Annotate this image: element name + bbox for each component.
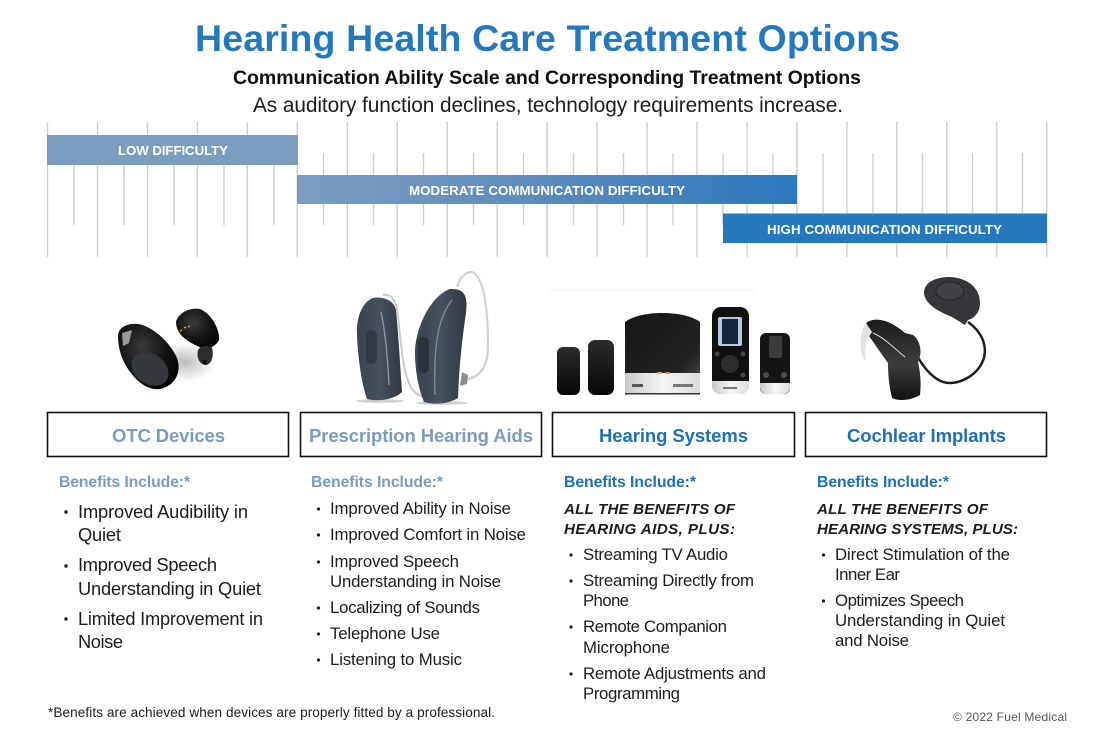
benefits heading: Benefits Include:* [59,474,191,491]
small remote [557,347,580,395]
communication ability scale [47,122,1047,257]
benefits list: Remote Adjustments and [583,664,766,683]
heading box [300,412,542,456]
benefits list [822,545,1010,650]
TV streamer [625,313,700,394]
bar: moderate communication difficulty: MODERATE COMMUNICATION DIFFICULTY [409,183,685,198]
benefits list: Streaming TV Audio [583,545,728,564]
heading box: Hearing Systems [599,425,748,446]
title: Hearing Health Care Treatment Options [195,17,900,59]
lead-in: HEARING SYSTEMS, PLUS: [817,521,1018,538]
heading box [48,412,288,456]
handset remote [712,307,749,394]
heading box: Cochlear Implants [847,425,1006,446]
benefits list: Optimizes Speech [835,591,964,610]
benefits list: Improved Ability in Noise [330,499,511,518]
benefits list: Listening to Music [330,650,462,669]
benefits list: Streaming Directly from [583,571,754,590]
benefits list: Improved Comfort in Noise [330,525,526,544]
tagline: As auditory function declines, technology requirements increase. [253,94,843,117]
image: cochlear implant [860,277,985,400]
bar: low difficulty: LOW DIFFICULTY [118,143,228,158]
benefits list: Inner Ear [835,565,900,584]
heading box: OTC Devices [112,425,225,446]
heading box: Prescription Hearing Aids [309,425,533,446]
benefits list: Direct Stimulation of the [835,545,1010,564]
panel: OTC devices [48,412,288,652]
lead-in: HEARING AIDS, PLUS: [564,521,735,538]
compact microphone [760,333,790,394]
benefits list: Phone [583,591,629,610]
panel: prescription hearing aids [300,412,542,669]
benefits list: Understanding in Noise [330,572,501,591]
benefits heading: Benefits Include:* [311,474,444,491]
benefits list: Understanding in Quiet [835,611,1005,630]
benefits list: Improved Speech [78,554,217,575]
benefits list [64,501,263,652]
benefits list [569,545,766,703]
image: hearing systems accessories [548,290,790,395]
benefits list: Programming [583,684,680,703]
benefits list: Quiet [78,524,121,545]
benefits list: Understanding in Quiet [78,578,261,599]
benefits list: Remote Companion [583,617,727,636]
benefits list [317,499,526,669]
benefits list: and Noise [835,631,909,650]
copyright: © 2022 Fuel Medical [953,710,1067,724]
panel: hearing systems [552,412,794,703]
benefits list: Noise [78,631,123,652]
benefits list: Microphone [583,638,670,657]
bar: high communication difficulty [723,214,1047,243]
bar: high communication difficulty: HIGH COMMUNICATION DIFFICULTY [767,222,1002,237]
bar: moderate communication difficulty [297,175,797,204]
image: prescription hearing aids [356,272,488,405]
image: OTC earbuds [118,309,219,393]
bar: low difficulty [47,135,298,165]
benefits heading: Benefits Include:* [564,474,697,491]
benefits list: Improved Speech [330,552,459,571]
footnote: *Benefits are achieved when devices are properly fitted by a professional. [48,705,495,720]
lead-in: ALL THE BENEFITS OF [563,501,736,518]
benefits list: Limited Improvement in [78,608,263,629]
benefits heading: Benefits Include:* [817,474,950,491]
benefits list: Improved Audibility in [78,501,248,522]
subtitle: Communication Ability Scale and Corresponding Treatment Options [233,67,861,89]
panel: cochlear implants [806,412,1046,650]
benefits list: Localizing of Sounds [330,598,480,617]
heading box [552,412,794,456]
heading box [806,412,1046,456]
lead-in [816,501,1018,538]
large clip [588,340,614,395]
lead-in: ALL THE BENEFITS OF [816,501,989,518]
benefits list: Telephone Use [330,624,440,643]
lead-in [563,501,736,538]
